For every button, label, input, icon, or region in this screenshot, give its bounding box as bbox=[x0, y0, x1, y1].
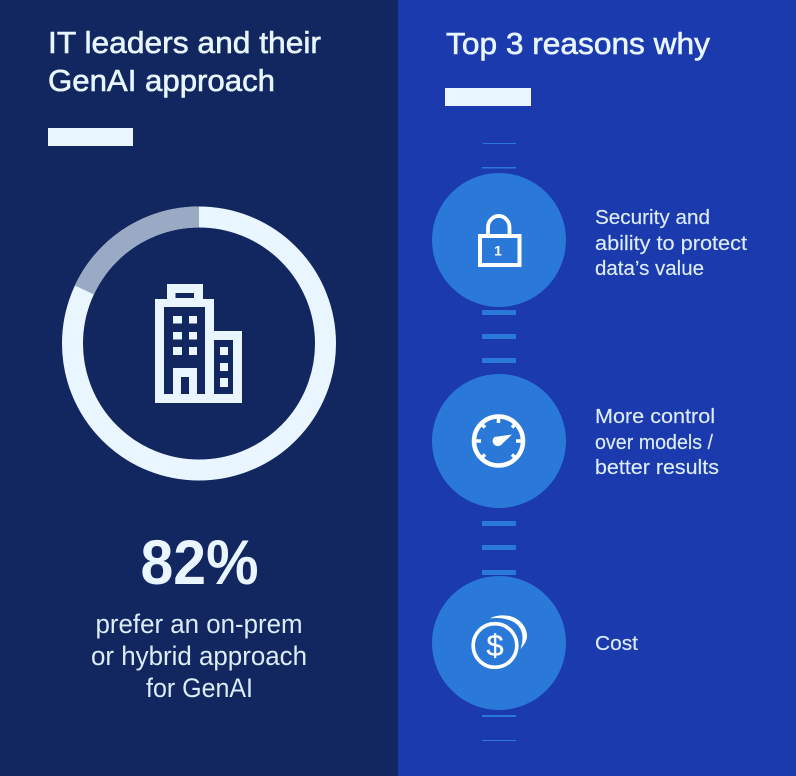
caption: prefer on-prem or hybrid: for GenAI bbox=[146, 673, 253, 703]
heading: IT leaders and their GenAI approach: IT leaders and their bbox=[48, 25, 321, 60]
label: control text: More control bbox=[595, 405, 715, 428]
heading accent bar bbox=[48, 128, 133, 146]
caption: prefer on-prem or hybrid: prefer an on-prem bbox=[96, 609, 302, 639]
heading: IT leaders and their GenAI approach: GenAI approach bbox=[48, 63, 275, 98]
caption: prefer on-prem or hybrid: or hybrid approach bbox=[91, 641, 307, 671]
timeline dashes bbox=[482, 143, 516, 741]
reason 1: security bbox=[432, 173, 747, 307]
circle badge bbox=[432, 374, 566, 508]
statistic: 82%: 82% bbox=[140, 528, 258, 598]
heading: IT leaders and their GenAI approach bbox=[48, 25, 321, 98]
label: security text: Security and bbox=[595, 206, 710, 229]
label: security text bbox=[595, 206, 747, 280]
reason 2: control bbox=[432, 374, 719, 508]
icon: padlock: 1 bbox=[494, 242, 502, 258]
label: security text: data’s value bbox=[595, 257, 704, 280]
donut chart: 82 percent bbox=[72, 217, 326, 470]
label: security text: ability to protect bbox=[595, 232, 747, 255]
icon: office building bbox=[155, 284, 242, 403]
panel: IT leaders approach bbox=[0, 0, 398, 776]
reason 3: cost bbox=[432, 576, 638, 710]
icon: coins bbox=[473, 615, 527, 667]
heading accent bar bbox=[445, 88, 531, 106]
label: cost text: Cost bbox=[595, 632, 638, 655]
icon: gauge bbox=[474, 416, 523, 466]
heading: Top 3 reasons why: Top 3 reasons why bbox=[446, 26, 711, 61]
label: control text bbox=[595, 405, 719, 479]
circle badge bbox=[432, 576, 566, 710]
icon: coins: $ bbox=[486, 628, 504, 663]
circle badge bbox=[432, 173, 566, 307]
caption: prefer on-prem or hybrid bbox=[91, 609, 307, 703]
label: control text: better results bbox=[595, 456, 719, 479]
label: control text: over models / bbox=[595, 431, 713, 454]
panel: top 3 reasons bbox=[398, 0, 796, 776]
icon: padlock bbox=[480, 216, 520, 265]
